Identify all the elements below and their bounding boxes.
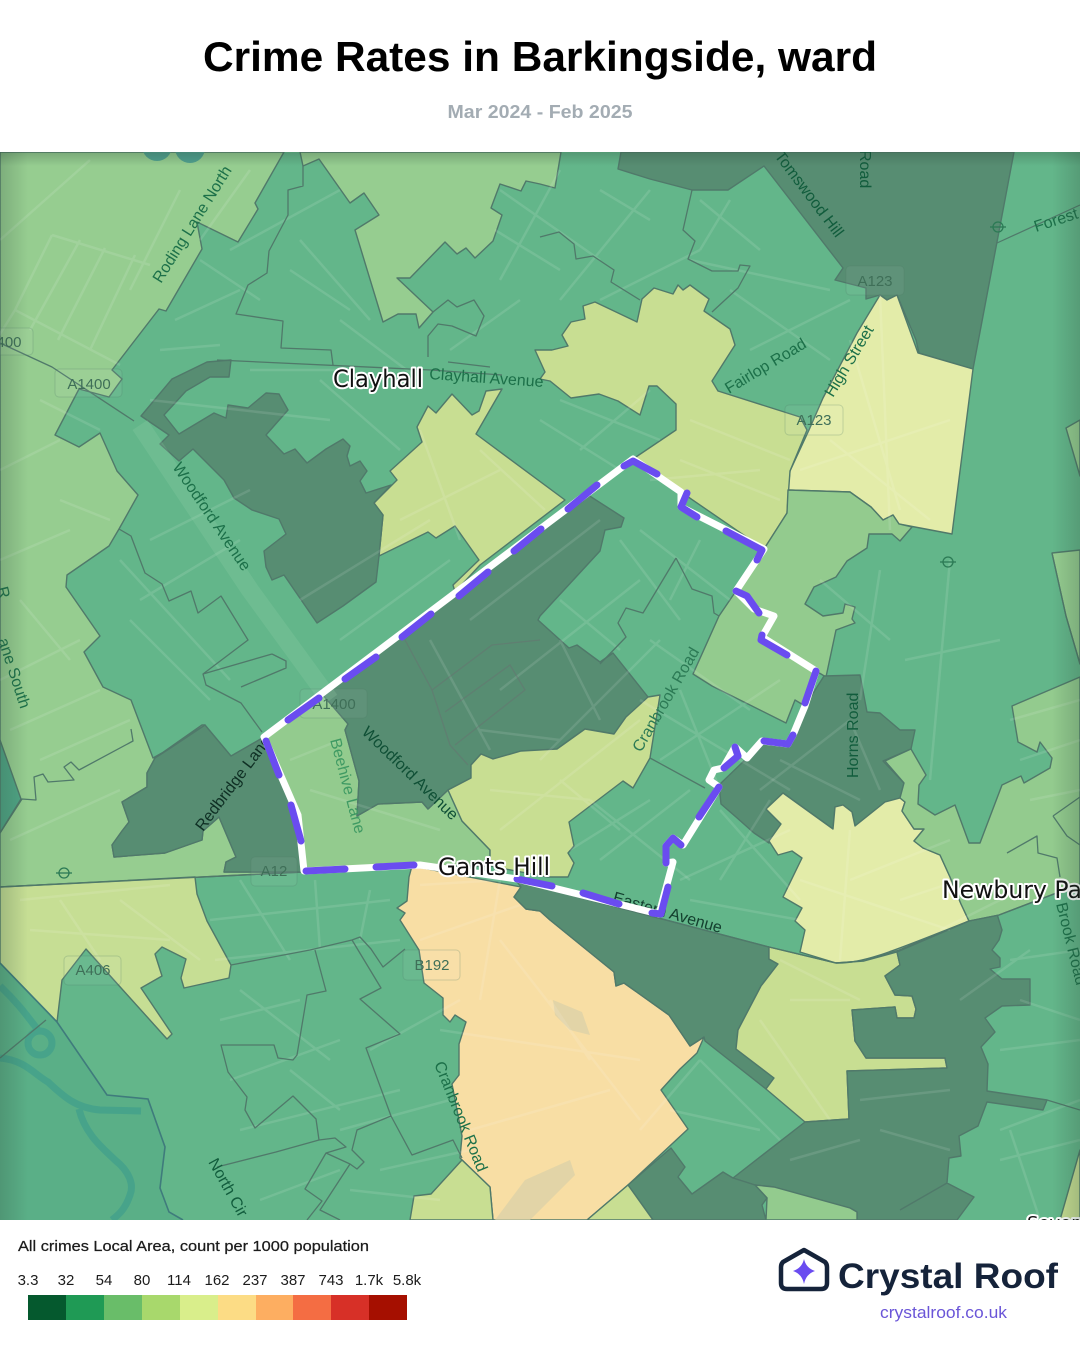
area: grey station features on orange	[495, 1000, 590, 1220]
road labels: Cranbrook Road	[630, 645, 703, 755]
legend values: 1.7k	[355, 1272, 384, 1289]
road labels: North Cir	[205, 1156, 251, 1221]
area: dark south-east	[733, 914, 1047, 1220]
legend colour scale	[28, 1295, 407, 1320]
icon: house with star	[781, 1250, 827, 1289]
road shields: B192	[414, 957, 450, 974]
road labels	[0, 148, 1080, 1221]
place labels	[333, 365, 1080, 1234]
area: ward south light	[448, 695, 660, 877]
area: dark west	[112, 725, 303, 872]
website url: crystalroof.co.uk	[880, 1304, 1008, 1322]
tube station icons	[56, 222, 1006, 878]
area: ward central dark	[322, 493, 648, 816]
road shields: A123	[857, 273, 893, 290]
legend title: All crimes Local Area, count per 1000 population	[18, 1238, 369, 1255]
area: far bottom-right pale	[1060, 1150, 1080, 1220]
legend values: 162	[204, 1272, 230, 1289]
area: light west bottom	[0, 877, 231, 1039]
area: light Beehive Lane	[264, 692, 490, 871]
logo: Crystal Roof	[781, 1250, 1058, 1322]
area: park south-west	[16, 982, 180, 1220]
legend values: 114	[167, 1272, 191, 1289]
interior lines within the ward dark area	[405, 640, 540, 765]
road labels: Woodford Avenue	[358, 724, 461, 824]
area: light east of ward	[736, 490, 912, 677]
road shields: A1400	[67, 376, 111, 393]
footer background	[0, 1220, 1080, 1350]
inner area boundaries	[0, 166, 1080, 1220]
road labels: Woodford Avenue	[169, 460, 254, 574]
road labels: Tomswood Hill	[771, 148, 846, 241]
road labels: Clayhall Avenue	[429, 366, 544, 391]
area: light block south	[755, 1185, 857, 1220]
title: Crime Rates in Barkingside, ward	[203, 33, 877, 80]
street pattern	[0, 160, 1080, 1220]
area: far east light	[1052, 550, 1080, 664]
road: Woodford Avenue corridor	[140, 425, 330, 700]
legend values: 387	[280, 1272, 306, 1289]
logo wordmark: Crystal Roof	[838, 1257, 1058, 1296]
area: dark east of ward	[719, 675, 915, 843]
area: orange Gants Hill	[397, 866, 704, 1220]
river in the park	[0, 986, 141, 1220]
area: left edge water block	[0, 740, 21, 833]
park boundary line	[0, 963, 183, 1220]
map edge shading	[0, 152, 1080, 1220]
subtitle: date range: Mar 2024 - Feb 2025	[448, 102, 632, 122]
road shields: A406	[75, 962, 111, 979]
area: Cranbrook light block	[693, 591, 816, 723]
legend values: 237	[242, 1272, 268, 1289]
road shields: A1400	[312, 696, 356, 713]
area: light bottom centre	[587, 1185, 653, 1220]
road labels: Redbridge Lane	[193, 733, 275, 834]
road labels: Fairlop Road	[722, 336, 810, 397]
area: dark Clayhall	[141, 360, 391, 623]
place labels: Clayhall	[333, 365, 423, 393]
legend values: 743	[318, 1272, 344, 1289]
road labels: Road	[856, 150, 873, 188]
water at the top edge	[144, 152, 204, 163]
road: Forest line	[997, 205, 1080, 243]
place labels: Gants Hill	[438, 853, 550, 881]
road: Eastern Avenue line	[0, 872, 1080, 963]
area: top-middle light	[300, 152, 561, 328]
road shields: A123	[796, 412, 832, 429]
area: north-west light	[0, 152, 303, 887]
legend	[18, 1238, 422, 1320]
legend values: 80	[134, 1272, 150, 1289]
area: pale north-east	[788, 295, 973, 534]
area: light Cranbrook south	[410, 1160, 493, 1220]
legend values	[18, 1272, 422, 1289]
road shields	[0, 266, 904, 985]
ward boundary	[264, 459, 816, 914]
road labels: Roding Lane North	[150, 163, 236, 286]
road labels: Horns Road	[845, 693, 862, 778]
road labels: Eastern Avenue	[611, 890, 724, 937]
road labels: Beehive Lane	[326, 737, 368, 836]
legend values: 5.8k	[393, 1272, 422, 1289]
area: light Clayhall south	[374, 389, 565, 592]
area: light south-east	[736, 947, 947, 1122]
place labels: Sever	[1027, 1213, 1079, 1234]
area: pale south-east	[766, 793, 969, 963]
legend values: 54	[96, 1272, 112, 1289]
legend values: 3.3	[18, 1272, 38, 1289]
road labels: Cranbrook Road	[430, 1059, 490, 1174]
area: dark north-east	[618, 152, 1014, 369]
legend values: 32	[58, 1272, 74, 1289]
road labels: Forest	[1032, 205, 1080, 236]
area: dark south-centre	[628, 1148, 767, 1220]
area: light centre-north	[535, 285, 807, 549]
area: dark strip south of Eastern Avenue	[514, 878, 778, 1089]
road shields: A12	[261, 863, 287, 880]
road labels: High Street	[822, 322, 878, 400]
